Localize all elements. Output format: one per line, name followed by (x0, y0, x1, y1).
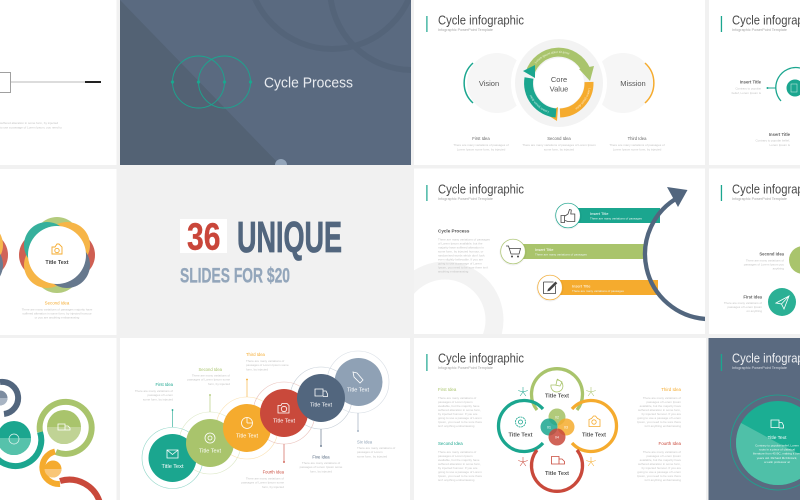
red ring segment (60, 480, 100, 500)
first idea note (135, 382, 174, 402)
second idea text: There are many variations of (746, 258, 784, 262)
panel: dark teal disc slide (708, 338, 800, 500)
cycle process text: majority have suffered alteration in (438, 246, 484, 250)
second idea note: passages of Lorem Ipsum some (187, 378, 230, 382)
disc text: roots in a piece of classical (759, 448, 795, 452)
cycle process text: going to use a passage of Lorem (438, 262, 482, 266)
center numbered circles (540, 408, 574, 446)
panel: chain of rings slide (0, 338, 116, 500)
flower petals (19, 217, 95, 293)
first idea text: by injected humour. If you are (438, 412, 478, 416)
first idea text: Ipsum, you need to be sure there (438, 420, 482, 424)
six idea note (357, 440, 395, 458)
panel: partial insert title slide (709, 0, 800, 165)
star accents (518, 387, 596, 466)
teal bar (570, 208, 660, 223)
first idea text: available, but the majority have (438, 404, 480, 408)
caption: suffered alteration in some form, by injected (0, 121, 58, 125)
fourth idea note: form, by injected (262, 485, 284, 489)
second idea text: passages of Lorem Ipsum (438, 454, 473, 458)
step 2 disc: Title Text (199, 448, 221, 454)
fourth idea text: going to use a passage of Lorem (637, 470, 681, 474)
first idea text: on anything (746, 309, 762, 313)
title (720, 184, 800, 201)
panel: four petal slide (414, 338, 706, 500)
center numbered circles: 04 (555, 436, 559, 440)
third idea note: form, by injected (246, 368, 268, 372)
second idea text: suffered alteration in some form, (438, 462, 481, 466)
six idea note: passages of Lorem (357, 450, 383, 454)
center numbered circles: 03 (564, 426, 568, 430)
connector box (0, 72, 10, 92)
third idea text: There are many variations of (643, 396, 681, 400)
icon: pencil and pad (536, 274, 564, 302)
second idea text: There are many variations of passages majority have (22, 308, 93, 312)
third idea text (637, 387, 682, 428)
insert title one (732, 80, 762, 95)
first idea text: suffered alteration in some form, (438, 408, 481, 412)
green cycle arrow (526, 48, 594, 81)
third idea note: There are many variations of (246, 359, 284, 363)
disc text: literature from 45 BC, making it over (753, 452, 800, 456)
second idea text: passages of Lorem Ipsum you (744, 262, 784, 266)
core value label line 2: Value (550, 84, 568, 94)
third idea text: Third Idea (661, 387, 682, 392)
fourth idea text: Ipsum, you need to be sure there (637, 474, 681, 478)
fourth idea text: isn't anything embarrassing (645, 478, 681, 482)
step 3 disc (223, 404, 271, 452)
teal bar: Insert Title (590, 211, 609, 216)
fourth idea note: passages of Lorem Ipsum some (241, 480, 284, 484)
six idea note: Six Idea (357, 440, 373, 444)
core value label: Core (551, 75, 567, 84)
title: Infographic PowerPoint Template (732, 197, 787, 201)
diagonal shade (120, 0, 280, 165)
first idea text (438, 387, 482, 428)
disc text: Title Text (768, 435, 787, 441)
five idea note: form, by injected (310, 470, 332, 474)
fourth idea text: There are many variations of (643, 450, 681, 454)
heading: Cycle Process (264, 76, 353, 92)
partial flower (0, 234, 8, 276)
third idea text (609, 136, 665, 152)
third idea text: Third Idea (628, 136, 647, 141)
first idea text: passages of Lorem Ipsum (438, 400, 473, 404)
six idea note: There are many variations of (357, 446, 395, 450)
cycle process text: even slightly believable. If you are (438, 258, 483, 262)
step 4 disc: Title Text (273, 418, 295, 424)
second idea text: There are many variations of (438, 450, 476, 454)
icon: camera (52, 244, 62, 254)
right petal (572, 400, 617, 452)
teal bar: There are many variations of passages (590, 216, 642, 220)
title: Cycle infographic (438, 12, 524, 28)
third idea text: going to use a passage of Lorem (637, 416, 681, 420)
disc text: a Latin professor at (764, 460, 790, 464)
outline rings (142, 351, 389, 488)
title: Cycle infographic (438, 350, 524, 366)
insert title one: Insert Title (740, 80, 762, 84)
second idea text: some form, by injected (544, 148, 574, 152)
six idea note: some form, by injected (357, 454, 388, 458)
second idea text: or you are anything embarrassing (35, 316, 80, 320)
green bar: There are many variations of passages (535, 252, 587, 256)
core halo (511, 35, 607, 131)
top petal: Title Text (545, 394, 569, 400)
step 4 disc (260, 389, 308, 437)
second idea text: Second Idea (759, 252, 785, 256)
first idea note: passages of Lorem (147, 393, 174, 397)
title: Cycle infographic (438, 182, 524, 196)
panel: partial ideas slide (709, 168, 800, 334)
fourth idea text: suffered alteration in some form, (638, 462, 681, 466)
left petal: Title Text (508, 432, 533, 438)
step 5 disc: Title Text (310, 402, 332, 408)
title (426, 12, 524, 32)
curved arrow (645, 187, 706, 319)
first idea text (453, 136, 509, 152)
first idea text: There are many variations of (438, 396, 476, 400)
insert title one: Contrary to popular (735, 86, 761, 90)
venn circles (171, 56, 252, 108)
first idea note: some form, by injected (143, 398, 173, 402)
fourth idea text: available, but the majority have (640, 458, 681, 462)
second idea text: Second Idea (45, 300, 70, 306)
36 badge: 36 (187, 216, 220, 258)
fourth idea note (241, 470, 285, 489)
second idea text: by injected humour. If you are (438, 466, 478, 470)
caption: to use a passage of Lorem Ipsum, you need to (0, 126, 62, 130)
navy ring (0, 382, 18, 414)
background rings (248, 0, 494, 70)
first idea note: There are many variations of (135, 389, 173, 393)
step 1 disc (148, 434, 196, 482)
second idea text (744, 252, 785, 270)
green bar (515, 244, 647, 259)
bottom petal: Title Text (545, 471, 569, 477)
panel: six step diagonal chain (120, 338, 410, 500)
second idea note: form, by injected (208, 382, 230, 386)
disc text: Contrary to popular belief, Lorem (755, 444, 799, 448)
first idea circle (768, 288, 796, 316)
promo headline (180, 213, 342, 288)
second idea text: available, but the majority have (438, 458, 480, 462)
second idea circle (789, 246, 800, 274)
first idea text: First Idea (438, 387, 457, 392)
panel: arrow and bars slide (414, 168, 705, 334)
third idea note (246, 352, 289, 372)
orange bar: There are many variations of passages (572, 289, 624, 293)
connector line (11, 82, 85, 83)
title: Infographic PowerPoint Template (438, 28, 493, 32)
cycle process text (438, 228, 490, 274)
fourth idea text: Fourth Idea (659, 441, 682, 446)
insert title two: Insert Title (769, 132, 791, 137)
insert title two: Lorem Ipsum is (769, 143, 790, 147)
step 1 disc: Title Text (161, 464, 184, 470)
first idea text (724, 294, 763, 313)
center numbered circles: 02 (555, 416, 559, 420)
outer ring (730, 395, 800, 490)
cycle process text: There are many variations of passages (438, 238, 490, 242)
fourth idea text: by injected humour. If you are (642, 466, 681, 470)
five idea note: passages of Lorem Ipsum some (300, 465, 343, 469)
teal disc with wedge (730, 395, 800, 495)
second idea text: anything (773, 266, 784, 270)
title (721, 350, 800, 371)
first idea text: First Idea (743, 294, 763, 300)
insert title two: Contrary to popular belief, (755, 138, 790, 142)
title (426, 184, 524, 201)
second idea note: There are many variations of (192, 374, 230, 378)
orange ring and disc (42, 452, 62, 484)
title: Infographic PowerPoint Template (438, 366, 493, 370)
cycle process text: anything embarrassing (438, 270, 469, 274)
orange bar (552, 280, 658, 295)
first idea text: First Idea (472, 136, 490, 141)
orange cycle arrow (550, 82, 594, 121)
teal cycle arrow: Lorem ipsum dolor (530, 95, 549, 114)
orange cycle arrow: Lorem ipsum dolor (576, 88, 591, 110)
first idea text: Lorem Ipsum some form, by injected (457, 148, 506, 152)
third idea text: There are many variations of passages of (609, 143, 665, 147)
orange bar: Insert Title (572, 284, 591, 288)
caption (0, 122, 62, 129)
icon: thumbs up (554, 202, 582, 230)
title: Infographic PowerPoint Template (732, 28, 787, 32)
second idea text (22, 300, 93, 320)
second idea text (438, 441, 482, 482)
slides for 20: SLIDES FOR $20 (180, 264, 290, 288)
top petal (532, 369, 582, 410)
five idea note: Five Idea (312, 454, 330, 460)
five idea note: There are many variations of (302, 461, 340, 465)
second idea text: Second Idea (547, 136, 571, 141)
second idea text: Ipsum, you need to be sure there (438, 474, 482, 478)
panel: cycle process cover (120, 0, 411, 165)
second idea text: Second Idea (438, 441, 463, 446)
icon: paper plane (776, 296, 789, 309)
five idea note (300, 454, 343, 474)
cycle process text: randomised words which don't look (438, 254, 485, 258)
fourth idea text (637, 441, 682, 482)
green bar: Insert Title (535, 247, 554, 252)
icon: cart (500, 238, 526, 266)
bottom dot (275, 159, 287, 165)
title (720, 15, 800, 32)
disc text: years old. Richard McClintock, (757, 456, 797, 460)
cycle process text: some form, by injected humour, or (438, 250, 483, 254)
disc text (753, 435, 800, 464)
teal cycle arrow (523, 65, 556, 118)
unique word: UNIQUE (237, 213, 342, 262)
first idea text: going to use a passage of Lorem (438, 416, 482, 420)
vision circle (464, 53, 527, 113)
green ring and disc (40, 402, 92, 454)
panel: petal flower slide (0, 169, 116, 335)
panel: partial connector slide (0, 0, 116, 165)
step 6 disc (334, 358, 382, 406)
cycle process text: Cycle Process (438, 228, 470, 234)
first idea text: There are many variations of passages of (453, 143, 509, 147)
second idea text (522, 136, 596, 152)
second idea note: Second Idea (198, 367, 223, 372)
icon: truck (771, 420, 784, 428)
third idea text: isn't anything embarrassing (645, 424, 681, 428)
insert title one: belief, Lorem Ipsum is (732, 91, 761, 95)
second idea text: suffered alteration in some form, by injected humour (22, 312, 92, 316)
fourth idea note: Fourth Idea (263, 470, 285, 474)
title: Infographic PowerPoint Template (732, 366, 787, 370)
third idea note: Third Idea (246, 352, 266, 357)
flower label: Title Text (45, 260, 69, 266)
step 6 disc: Title Text (347, 388, 369, 394)
panel: vision core value mission (414, 0, 705, 165)
second idea text: going to use a passage of Lorem (438, 470, 482, 474)
fourth idea text: passages of Lorem Ipsum (646, 454, 681, 458)
third idea text: suffered alteration in some form, (638, 408, 681, 412)
second idea text: isn't anything embarrassing (438, 478, 475, 482)
step 5 disc (297, 374, 345, 422)
right petal: Title Text (582, 432, 606, 438)
teal ring and disc (0, 421, 41, 466)
title (426, 350, 524, 371)
step 2 disc (186, 419, 234, 467)
third idea text: available, but the majority have (640, 404, 681, 408)
fourth idea note: There are many variations of (246, 476, 284, 480)
first idea text: passages of Lorem Ipsum (727, 305, 762, 309)
left petal (498, 400, 543, 452)
third idea text: Lorem Ipsum some form, by injected (613, 148, 662, 152)
title: Infographic PowerPoint Template (438, 197, 493, 201)
step 3 disc: Title Text (236, 434, 258, 440)
third idea text: passages of Lorem Ipsum (646, 400, 681, 404)
mission circle (593, 53, 654, 113)
second idea text: There are many variations of passages of Lorem Ipsum (522, 143, 596, 147)
background ring (414, 262, 504, 334)
step stems (172, 379, 359, 463)
mission label: Mission (620, 79, 646, 88)
cycle process text: of Lorem Ipsum available, but the (438, 242, 483, 246)
third idea text: Ipsum, you need to be sure there (637, 420, 681, 424)
connector end (85, 81, 101, 83)
third idea note: passages of Lorem Ipsum some (246, 363, 289, 367)
vision label: Vision (479, 79, 499, 88)
center numbered circles: 01 (547, 426, 551, 430)
third idea text: by injected humour. If you are (642, 412, 681, 416)
connector and ring icon (766, 68, 800, 101)
green cycle arrow: Lorem ipsum dolor sit amet (534, 50, 570, 64)
first idea text: isn't anything embarrassing (438, 424, 475, 428)
first idea note: First Idea (156, 382, 174, 387)
insert title two (755, 132, 791, 147)
bottom petal (532, 450, 582, 491)
first idea text: There are many variations of (724, 301, 762, 305)
second idea note (187, 367, 230, 386)
cycle process text: Ipsum, you need to be sure there isn't (438, 266, 488, 270)
